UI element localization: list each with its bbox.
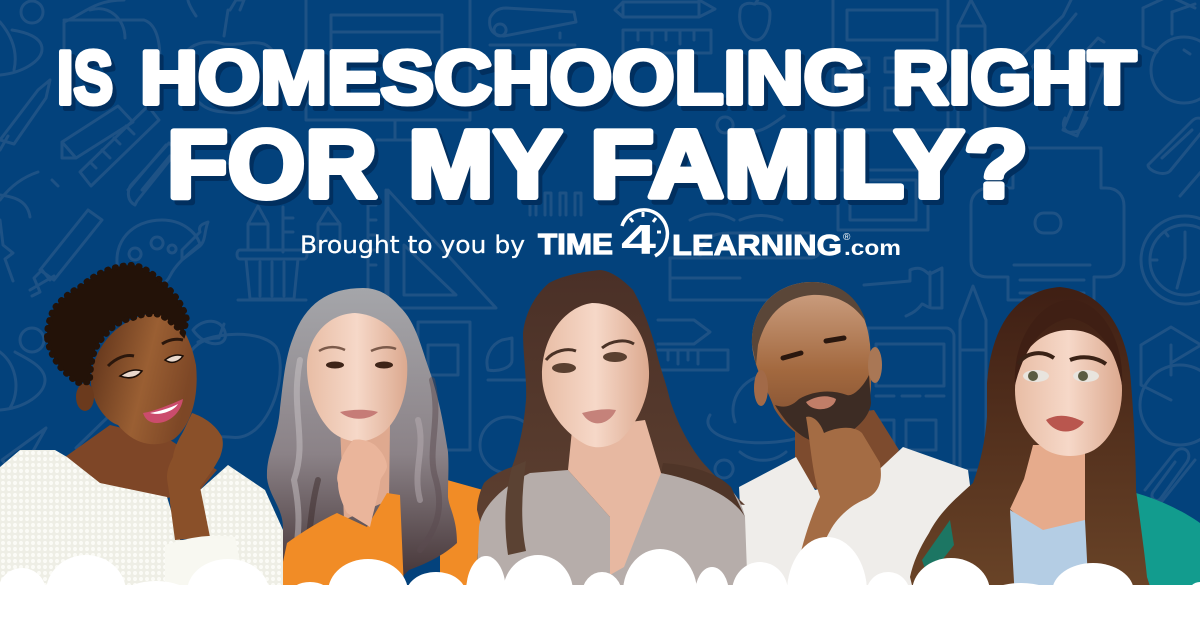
neck (65, 425, 217, 498)
head (752, 282, 871, 442)
face (307, 313, 407, 442)
title white text: HOMESCHOOLING (140, 36, 866, 120)
hair (477, 270, 745, 555)
title shadow: HOMESCHOOLING (144, 40, 870, 124)
title shadow: MY (412, 116, 566, 223)
hand (337, 439, 387, 527)
title white text: IS (57, 36, 113, 120)
blue t-shirt (1010, 510, 1089, 600)
grey top (476, 470, 748, 600)
ears (868, 347, 882, 383)
white cloud border (0, 537, 1200, 627)
left teal sliver (922, 520, 954, 578)
ear (76, 383, 94, 411)
shirt (739, 447, 985, 600)
title (57, 36, 1140, 223)
hair parting (1015, 300, 1122, 385)
sweater cuff (165, 536, 247, 597)
logo word TIME: TIME (538, 229, 613, 261)
person 4: man with beard (739, 282, 985, 600)
icon: clock ring with 4 (621, 210, 667, 263)
logo word LEARNING: LEARNING (672, 230, 842, 262)
eyes and mouth (326, 362, 344, 368)
mouth (1046, 416, 1084, 432)
title white text (57, 36, 1136, 218)
person 3: woman with long brown hair (476, 270, 748, 600)
title white text: FAMILY? (590, 111, 1028, 218)
neck (340, 425, 390, 520)
front hair strands (505, 461, 526, 555)
title white text: RIGHT (892, 36, 1136, 120)
chest and neck (568, 420, 661, 575)
hand and arm (167, 413, 223, 540)
eyes and mouth (783, 338, 844, 358)
title shadow: IS (61, 40, 117, 124)
smile (143, 399, 183, 423)
title shadow (61, 40, 1140, 223)
person 2: woman with grey hair (267, 288, 483, 590)
face (91, 313, 197, 444)
logo: Time4Learning.com (538, 210, 901, 263)
title shadow: FOR (171, 116, 381, 223)
eyes and brows (1023, 370, 1049, 382)
white sweater (0, 450, 283, 600)
hair (752, 282, 866, 365)
hair (267, 288, 457, 590)
hair strands (294, 360, 439, 570)
brought to you by line: Brought to you by (300, 231, 525, 259)
curly hair (47, 265, 187, 383)
eyes (120, 355, 183, 378)
icon: clock ring with 4: 4 (621, 216, 657, 263)
hand and arm (798, 417, 881, 567)
title white text: MY (408, 111, 562, 218)
registered mark: ® (843, 232, 851, 243)
teal cardigan (1130, 493, 1200, 600)
neck and chest (1010, 445, 1085, 539)
beard (775, 375, 871, 442)
title shadow: FAMILY? (594, 116, 1032, 223)
title shadow: RIGHT (896, 40, 1140, 124)
person 5: woman biting lip (910, 287, 1200, 602)
title white text: FOR (167, 111, 377, 218)
neck (795, 410, 899, 495)
logo suffix .com: .com (844, 237, 901, 260)
eyes and mouth (552, 363, 576, 373)
face (542, 303, 649, 447)
person 1: woman with short curly hair (0, 265, 283, 600)
orange sweater (277, 493, 404, 590)
hair (910, 287, 1155, 602)
face (1015, 330, 1122, 456)
right orange shoulder (440, 478, 483, 590)
